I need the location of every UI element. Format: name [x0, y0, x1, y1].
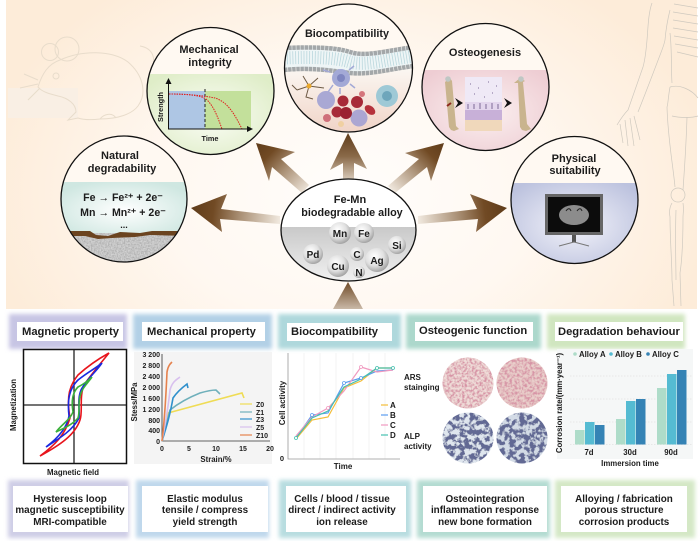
healed bone	[514, 76, 531, 131]
alloying element atoms: C	[353, 250, 361, 261]
chart: stress-strain curves: Z5	[256, 425, 264, 432]
strength over time chart: Time	[202, 134, 218, 143]
summary box: degradation	[555, 480, 695, 538]
heading: natural degradability: Natural	[101, 150, 139, 162]
chart: hysteresis loop: Magnetization	[9, 379, 18, 431]
chart: corrosion rate bars: Alloy A	[579, 350, 606, 359]
chart: stress-strain curves: 2 000	[142, 385, 160, 392]
summary box: mechanical	[136, 480, 269, 538]
header: degradation behaviour	[547, 314, 685, 349]
circle: biocompatibility	[284, 4, 414, 134]
summary box: osteogenic: new bone formation	[438, 517, 532, 528]
chart: corrosion rate bars	[555, 349, 693, 468]
summary box: degradation: corrosion products	[579, 517, 670, 528]
chart: stress-strain curves: Z0	[256, 402, 264, 409]
arrow: up from property panels	[333, 282, 363, 309]
central circle: Fe-Mn biodegradable alloy	[280, 179, 418, 283]
summary box: biocompatibility: Cells / blood / tissue	[294, 494, 390, 505]
cells	[292, 66, 398, 127]
osteogenic staining images: stainging	[404, 383, 440, 392]
chart: stress-strain curves: 2 800	[142, 363, 160, 370]
summary box: osteogenic	[417, 480, 550, 538]
summary box: osteogenic: inflammation response	[431, 505, 540, 516]
circle: physical suitability	[510, 136, 640, 267]
chart: stress-strain curves: 3 200	[142, 352, 160, 359]
chart: corrosion rate bars: Immersion time	[601, 459, 659, 468]
strength over time chart	[156, 78, 253, 143]
chart: cell activity: Time	[334, 462, 353, 471]
alloying element atoms: Fe	[358, 229, 370, 240]
chart: stress-strain curves: 10	[212, 446, 220, 453]
chart: cell activity: B	[390, 411, 396, 420]
chart: cell activity: D	[390, 431, 396, 440]
header: mechanical property: Mechanical property	[147, 326, 257, 338]
alloying element atoms	[303, 222, 406, 279]
alloying element atoms: N	[355, 268, 363, 279]
cell membrane	[284, 46, 414, 73]
chart: stress-strain curves: Z10	[256, 433, 268, 440]
chart: stress-strain curves: 20	[266, 446, 274, 453]
chart: stress-strain curves: 0	[156, 439, 160, 446]
header: magnetic property	[9, 314, 127, 349]
header: osteogenic function: Osteogenic function	[419, 325, 527, 337]
summary box: degradation: porous structure	[584, 505, 664, 516]
chart: corrosion rate bars: 30d	[623, 448, 637, 457]
osteogenic staining images: activity	[404, 442, 432, 451]
alloying element atoms: Ag	[370, 256, 384, 267]
chart: stress-strain curves: Stess/MPa	[130, 382, 139, 422]
chart: corrosion rate bars: Corrosion rate/(mm·year⁻¹)	[555, 352, 564, 453]
chart: corrosion rate bars: Alloy C	[652, 350, 679, 359]
circle: natural degradability	[60, 136, 188, 265]
chart: corrosion rate bars: Alloy B	[615, 350, 642, 359]
top background panel	[6, 0, 697, 309]
summary box: osteogenic: Osteointegration	[445, 494, 525, 505]
osteogenic staining images	[404, 358, 548, 464]
arrowhead left	[455, 98, 463, 108]
summary box: degradation: Alloying / fabrication	[575, 494, 673, 505]
summary box: magnetic	[8, 480, 129, 538]
chart: stress-strain curves: Z3	[256, 417, 264, 424]
tissue section	[465, 77, 502, 131]
chart: stress-strain curves: Strain/%	[200, 455, 232, 464]
osteogenic staining images: ALP	[404, 432, 421, 441]
alloying element atoms: Pd	[307, 250, 319, 261]
chart: corrosion rate bars: 7d	[584, 448, 594, 457]
chart: stress-strain curves: 800	[148, 418, 160, 425]
equations: Mn → Mn²⁺ + 2e⁻	[80, 207, 166, 219]
alloying element atoms: Si	[392, 241, 402, 252]
chart: stress-strain curves: 400	[148, 428, 160, 435]
chart: cell activity: Cell activity	[278, 380, 287, 425]
summary box: magnetic: magnetic susceptibility	[15, 505, 125, 516]
central circle: Fe-Mn biodegradable alloy: biodegradable alloy	[301, 207, 403, 219]
heading: mechanical integrity: Mechanical	[179, 44, 239, 56]
circle: natural degradability: degradability	[88, 163, 157, 175]
chart: stress-strain curves: Z1	[256, 410, 264, 417]
arrowhead right	[504, 98, 512, 108]
header: biocompatibility	[278, 314, 401, 349]
chart: stress-strain curves: 0	[160, 446, 164, 453]
summary box: magnetic: Hysteresis loop	[33, 494, 107, 505]
heading: alloy: Fe-Mn	[334, 194, 366, 206]
chart: cell activity: A	[390, 401, 396, 410]
circle: mechanical integrity: integrity	[188, 57, 233, 69]
header: degradation behaviour: Degradation behaviour	[558, 326, 680, 338]
chart: cell activity	[278, 353, 400, 471]
heading: biocompatibility: Biocompatibility	[305, 28, 389, 40]
summary box: mechanical: tensile / compress	[162, 505, 249, 516]
illustration: faint human skeleton	[617, 3, 698, 306]
arrow: to physical suitability	[418, 194, 507, 232]
summary box: mechanical: yield strength	[173, 517, 237, 528]
equations: ...	[120, 220, 128, 230]
chart: cell activity: 0	[280, 454, 284, 463]
arrow: to natural degradability	[191, 194, 280, 232]
alloying element atoms: Cu	[331, 262, 345, 273]
arrow: to mechanical integrity	[256, 143, 309, 193]
header: osteogenic function	[406, 314, 541, 349]
header: biocompatibility: Biocompatibility	[291, 326, 379, 338]
summary box: biocompatibility: ion release	[316, 517, 368, 528]
equations	[80, 192, 166, 230]
strength over time chart: Strength	[156, 92, 165, 122]
arrow: to biocompatibility	[330, 133, 367, 180]
chart: stress-strain curves: 1 200	[142, 407, 160, 414]
chart: corrosion rate bars: 90d	[664, 448, 678, 457]
header: mechanical property	[133, 314, 272, 349]
circle: osteogenesis	[421, 24, 551, 154]
chart: stress-strain curves: 15	[239, 446, 247, 453]
MRI monitor	[545, 194, 603, 246]
chart: hysteresis loop	[9, 350, 126, 477]
osteogenic staining images: ARS	[404, 373, 422, 382]
chart: hysteresis loop: Magnetic field	[47, 468, 99, 477]
summary box: magnetic: MRI-compatible	[33, 517, 107, 528]
alloying element atoms: Mn	[333, 229, 347, 240]
header: magnetic property: Magnetic property	[22, 326, 120, 338]
equations: Fe → Fe²⁺ + 2e⁻	[83, 192, 163, 204]
chart: cell activity: C	[390, 421, 396, 430]
fractured bone	[445, 76, 459, 131]
circle: mechanical integrity	[146, 28, 276, 158]
heading: physical suitability: Physical	[552, 153, 596, 165]
arrow: to osteogenesis	[388, 143, 444, 193]
summary box: mechanical: Elastic modulus	[167, 494, 243, 505]
circle: physical suitability: suitability	[549, 165, 602, 177]
summary box: biocompatibility	[279, 480, 411, 538]
chart: stress-strain curves: 1 600	[142, 396, 160, 403]
summary box: biocompatibility: direct / indirect activity	[288, 505, 396, 516]
chart: stress-strain curves	[130, 352, 274, 464]
illustration: faint mouse	[8, 37, 154, 120]
chart: stress-strain curves: 5	[187, 446, 191, 453]
heading: osteogenesis: Osteogenesis	[449, 47, 521, 59]
chart: stress-strain curves: 2 400	[142, 374, 160, 381]
